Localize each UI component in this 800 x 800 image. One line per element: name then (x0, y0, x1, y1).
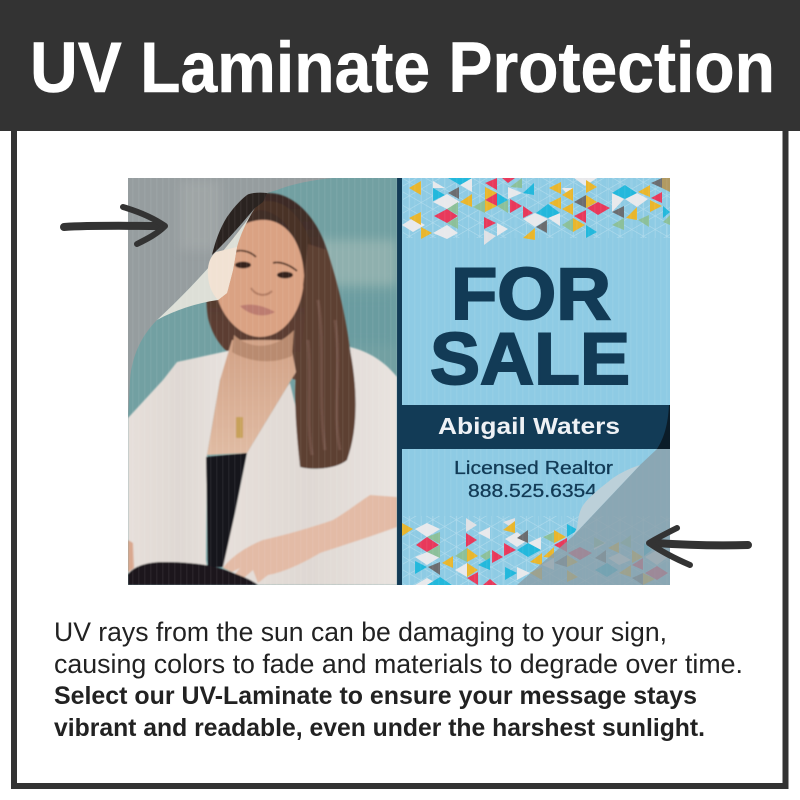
for sale heading (431, 266, 628, 386)
dark hair under peel (212, 193, 267, 255)
description text: UV rays from the sun can be damaging to your sign, (54, 617, 667, 647)
agent details: 888.525.6354 (468, 481, 597, 501)
arrow: lower right (649, 528, 748, 565)
triangle pattern: top (402, 178, 670, 245)
face (215, 220, 304, 337)
corrugation stripes (128, 178, 670, 585)
yard sign (128, 178, 670, 585)
peeled laminate shadow (128, 178, 333, 420)
peeled corner flap (572, 465, 640, 537)
triangle pattern: bottom (402, 518, 668, 585)
agent details (456, 460, 613, 498)
title banner (0, 0, 800, 131)
peeled laminate flap (157, 208, 255, 320)
for sale heading: FOR (451, 254, 611, 335)
agent name: Abigail Waters (438, 413, 620, 439)
description text: causing colors to fade and materials to degrade over time. (54, 649, 743, 679)
description text: vibrant and readable, even under the harshest sunlight. (54, 714, 705, 742)
blue panel (397, 178, 670, 585)
for sale heading: SALE (430, 319, 630, 400)
portrait (128, 193, 397, 585)
blazer (128, 350, 232, 585)
photo panel (128, 178, 397, 585)
black top (206, 453, 247, 567)
description text: Select our UV-Laminate to ensure your message stays (54, 682, 697, 710)
arm and hand (223, 495, 397, 583)
arrow: upper left (64, 207, 165, 244)
hair (206, 192, 328, 469)
face features (235, 262, 251, 268)
side hair (295, 244, 356, 468)
divider (397, 178, 402, 585)
peel shadow in band (657, 405, 670, 449)
chest (207, 340, 296, 455)
lap (128, 562, 258, 585)
triangle grid (403, 178, 670, 238)
name band (402, 405, 670, 449)
agent details: Licensed Realtor (454, 458, 613, 478)
flap skin highlight (208, 247, 237, 300)
description text (54, 617, 743, 742)
peeled corner (517, 449, 670, 585)
